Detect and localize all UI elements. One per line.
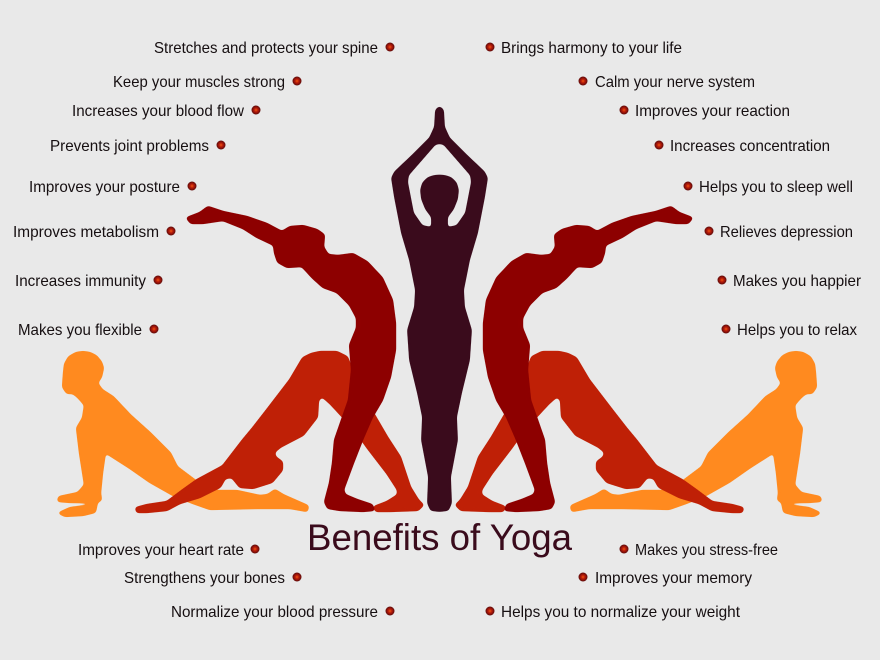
- benefit: Makes you happier: Makes you happier: [733, 273, 862, 290]
- benefit: Normalize your blood pressure: Normalize your blood pressure: [171, 604, 378, 621]
- benefit: Increases concentration: Increases concentration: [670, 138, 830, 155]
- figure: right orange upward dog pose: [571, 352, 821, 516]
- benefit: Improves your posture: Improves your posture: [29, 179, 180, 196]
- benefit: Brings harmony to your life: Brings harmony to your life: [501, 40, 682, 57]
- benefit: Makes you flexible: Makes you flexible: [18, 322, 142, 339]
- benefit: Helps you to normalize your weight: Helps you to normalize your weight: [501, 604, 741, 621]
- benefit: Improves your heart rate: Improves your heart rate: [78, 542, 244, 559]
- benefit: Helps you to sleep well: Helps you to sleep well: [699, 179, 853, 196]
- figure: right red downward dog pose: [456, 352, 743, 512]
- benefit: Improves metabolism: Improves metabolism: [13, 224, 159, 241]
- benefit: Improves your memory: Improves your memory: [595, 570, 752, 587]
- benefit: Helps you to relax: Helps you to relax: [737, 322, 857, 339]
- figure: left dark red side bend pose: [187, 207, 395, 511]
- benefit: Prevents joint problems: Prevents joint problems: [50, 138, 209, 155]
- benefit: Makes you stress-free: Makes you stress-free: [635, 542, 778, 559]
- benefit: Calm your nerve system: Calm your nerve system: [595, 74, 755, 91]
- figure: left orange upward dog pose: [58, 352, 308, 516]
- benefit: Increases immunity: Increases immunity: [15, 273, 146, 290]
- title: Benefits of Yoga: [307, 517, 572, 558]
- benefit: Improves your reaction: Improves your reaction: [635, 103, 790, 120]
- figure: left red downward dog pose: [136, 352, 423, 512]
- benefit: Strengthens your bones: Strengthens your bones: [124, 570, 285, 587]
- benefit: Keep your muscles strong: Keep your muscles strong: [113, 74, 285, 91]
- benefit: Stretches and protects your spine: Stretches and protects your spine: [154, 40, 378, 57]
- benefit: Increases your blood flow: Increases your blood flow: [72, 103, 244, 120]
- figure: central standing pose with raised arms: [392, 107, 487, 511]
- figure: right dark red side bend pose: [484, 207, 692, 511]
- benefit: Relieves depression: Relieves depression: [720, 224, 853, 241]
